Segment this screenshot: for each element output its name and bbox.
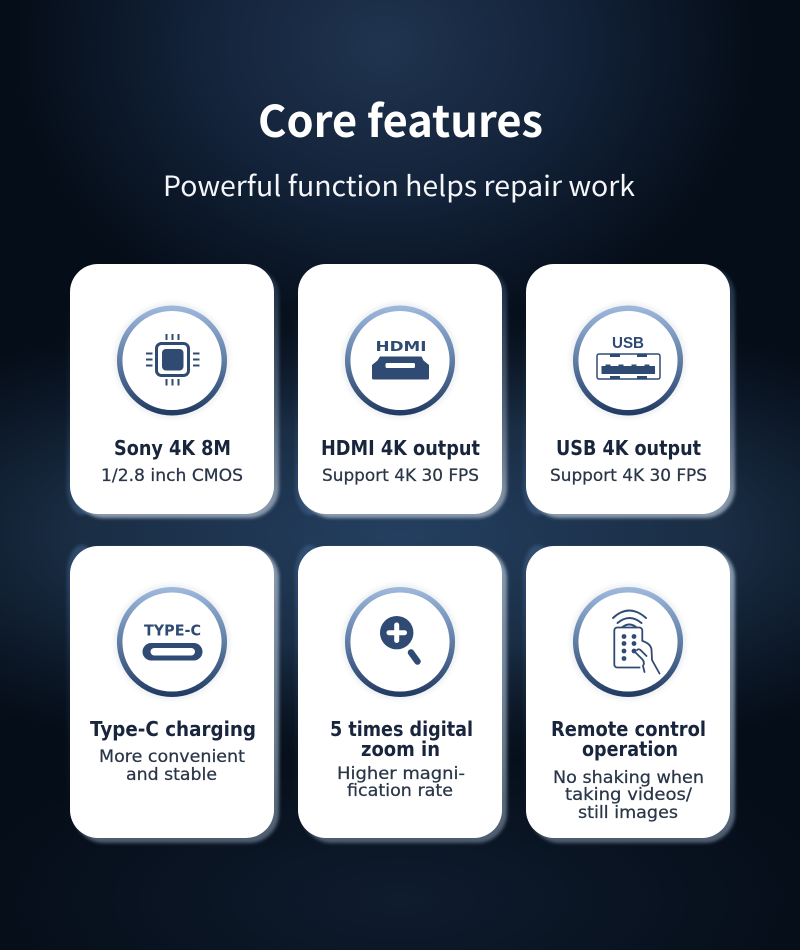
description: fication rate <box>347 781 453 801</box>
description: Higher magni- <box>337 764 465 784</box>
heading: HDMI 4K output <box>321 436 480 460</box>
description: and stable <box>126 765 217 785</box>
panel: Sony 4K 8M <box>67 264 279 518</box>
heading: USB 4K output <box>556 436 701 460</box>
heading: Type-C charging <box>90 717 256 741</box>
panel: 5 times digital zoom in <box>295 545 507 843</box>
panel: HDMI 4K output <box>295 264 507 518</box>
description <box>99 747 245 785</box>
heading: operation <box>582 737 678 761</box>
title: Core features <box>258 86 543 150</box>
description <box>553 768 704 823</box>
heading: zoom in <box>361 737 440 761</box>
description: still images <box>578 803 678 823</box>
heading: Remote control <box>551 717 706 741</box>
icon: HDMI port: HDMI <box>376 339 426 355</box>
heading <box>551 717 706 761</box>
panel: Remote control operation <box>523 545 735 843</box>
description <box>337 764 465 801</box>
icon: HDMI port <box>342 302 458 418</box>
icon: USB port: USB <box>612 335 644 352</box>
icon: USB port <box>570 302 686 418</box>
description: taking videos/ <box>565 785 692 805</box>
icon: Type-C port: TYPE-C <box>144 622 201 640</box>
heading: Sony 4K 8M <box>114 436 231 460</box>
description: No shaking when <box>553 768 704 788</box>
description: 1/2.8 inch CMOS <box>101 466 243 486</box>
icon: remote control in hand <box>570 584 686 700</box>
panel: USB 4K output <box>523 264 735 518</box>
heading: 5 times digital <box>330 717 473 741</box>
subtitle: Powerful function helps repair work <box>163 165 636 205</box>
icon: magnifier <box>342 584 458 700</box>
heading <box>330 717 473 761</box>
description: Support 4K 30 FPS <box>322 466 479 486</box>
description: More convenient <box>99 747 245 767</box>
panel: Type-C charging <box>67 545 279 843</box>
icon: camera sensor chip <box>114 302 230 418</box>
icon: Type-C port <box>114 584 230 700</box>
description: Support 4K 30 FPS <box>550 466 707 486</box>
